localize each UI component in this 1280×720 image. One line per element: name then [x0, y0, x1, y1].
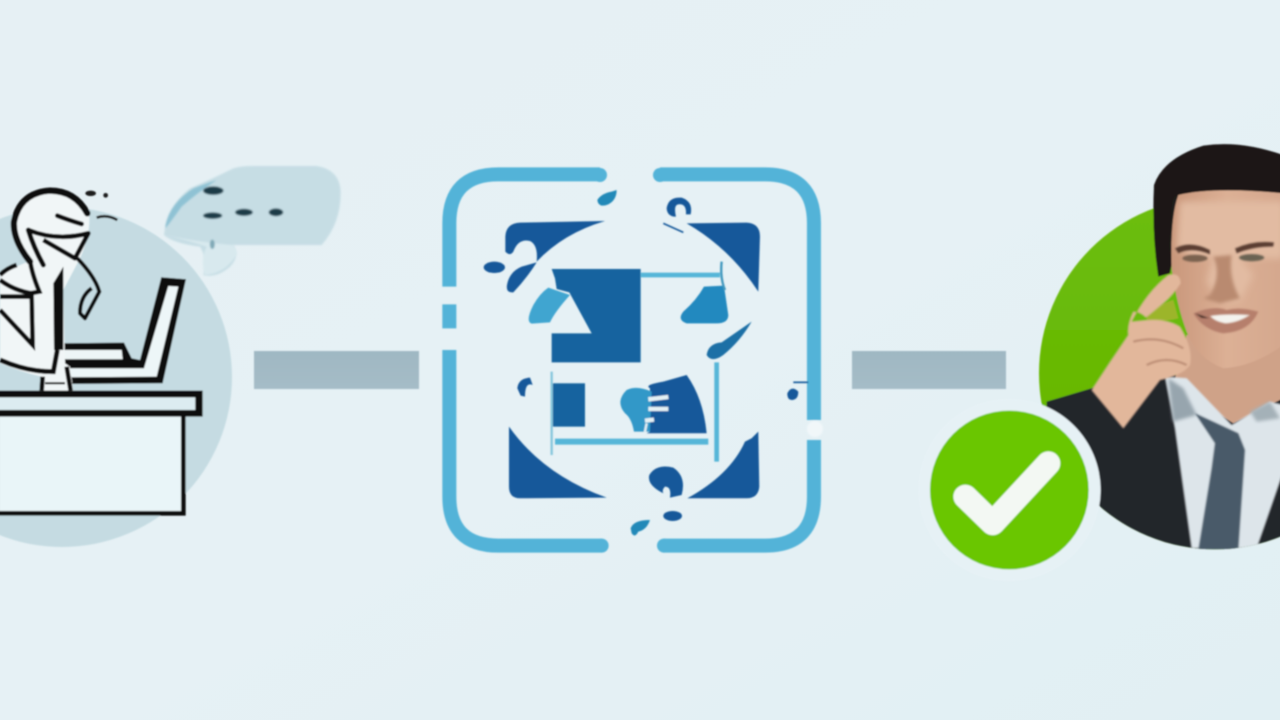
frame highlight — [807, 421, 823, 437]
hair — [1153, 144, 1280, 277]
infographic canvas — [0, 143, 1280, 570]
check badge halo — [918, 399, 1101, 581]
panel: central process icon — [449, 168, 823, 553]
panel: happy person in green circle — [918, 144, 1280, 581]
shirt — [1165, 377, 1280, 548]
neck — [1173, 335, 1280, 423]
left lamp shade — [529, 288, 570, 324]
lamp connectors — [552, 262, 725, 462]
small blue square — [553, 383, 585, 427]
connector bar left — [254, 351, 419, 389]
green between fingers — [1147, 300, 1178, 321]
jacket — [1047, 375, 1280, 568]
green circle — [1039, 197, 1280, 549]
check mark — [965, 463, 1048, 523]
person — [0, 191, 117, 391]
check badge — [930, 411, 1089, 569]
central blue panel — [552, 269, 641, 362]
speech bubble — [164, 166, 341, 276]
brush stroke — [707, 322, 752, 359]
face — [1171, 190, 1280, 368]
rounded frame — [449, 174, 814, 546]
bubble marks — [203, 187, 283, 249]
laptop — [63, 277, 186, 384]
hand — [1092, 274, 1191, 428]
dark corner pieces — [484, 198, 808, 521]
desk — [0, 391, 203, 513]
background circle — [0, 207, 232, 547]
person portrait — [1047, 144, 1280, 568]
panel: stressed worker at desk — [0, 166, 341, 547]
illustration group — [0, 144, 1280, 581]
tie — [1195, 413, 1245, 550]
facial features — [1175, 242, 1274, 333]
connector bar right — [852, 351, 1006, 389]
chat shape — [647, 375, 707, 433]
right lamp — [681, 286, 728, 323]
small teal blobs — [597, 190, 650, 535]
